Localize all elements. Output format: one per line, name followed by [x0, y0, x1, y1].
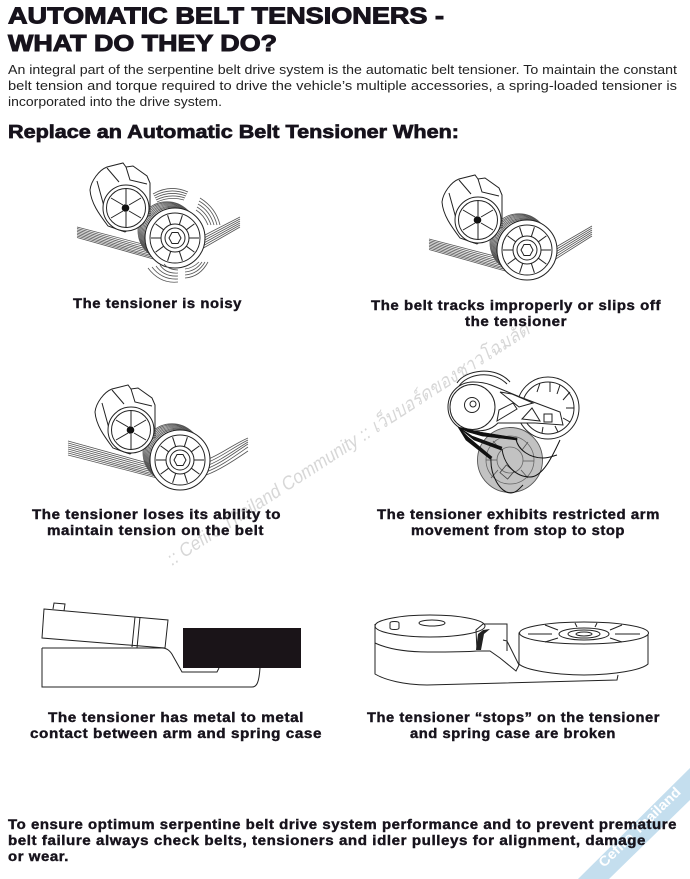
footer note: To ensure optimum serpentine belt drive system performance and to prevent premature — [8, 817, 677, 832]
caption: loses ability: maintain tension on the belt — [47, 523, 264, 538]
intro paragraph — [8, 62, 678, 109]
illustration: loses tension — [68, 385, 248, 490]
caption: belt tracks — [371, 298, 661, 329]
caption: broken stops: and spring case are broken — [410, 726, 616, 741]
intro paragraph: belt tension and torque required to drive the vehicle’s multiple accessories, a spring-loaded tensioner is — [8, 78, 678, 93]
caption: noisy: The tensioner is noisy — [73, 296, 242, 311]
illustration: restricted arm movement — [448, 371, 579, 493]
illustration: metal to metal contact — [42, 603, 301, 687]
caption: belt tracks: the tensioner — [465, 314, 567, 329]
title — [8, 2, 444, 56]
caption: belt tracks: The belt tracks improperly or slips off — [371, 298, 661, 313]
caption: restricted arm: The tensioner exhibits restricted arm — [377, 507, 660, 522]
footer note: belt failure always check belts, tensioners and idler pulleys for alignment, damage — [8, 833, 646, 848]
caption: loses ability — [32, 507, 281, 538]
intro paragraph: incorporated into the drive system. — [8, 94, 222, 109]
watermark text: :: Cefiro Thailand Community :: เว็บบอร์ดของชาวโฉมลัด — [162, 317, 535, 570]
corner ribbon: Cefiro Thailand — [595, 784, 684, 870]
corner ribbon — [578, 768, 690, 879]
caption: broken stops: The tensioner “stops” on the tensioner — [367, 710, 660, 725]
title: WHAT DO THEY DO? — [8, 30, 277, 56]
caption: broken stops — [367, 710, 660, 741]
illustration: belt tracks improperly — [429, 175, 592, 280]
title: AUTOMATIC BELT TENSIONERS - — [8, 2, 444, 28]
section heading: Replace an Automatic Belt Tensioner When: — [8, 121, 459, 142]
caption: metal contact: contact between arm and spring case — [30, 726, 322, 741]
illustration: broken stops — [375, 615, 648, 685]
intro paragraph: An integral part of the serpentine belt drive system is the automatic belt tensioner. To maintain the constant — [8, 62, 677, 77]
footer note — [8, 817, 677, 864]
footer note: or wear. — [8, 849, 69, 864]
caption: restricted arm — [377, 507, 660, 538]
illustration: noisy tensioner — [77, 163, 240, 282]
caption: metal contact — [30, 710, 322, 741]
caption: restricted arm: movement from stop to stop — [411, 523, 625, 538]
caption: loses ability: The tensioner loses its ability to — [32, 507, 281, 522]
caption: metal contact: The tensioner has metal to metal — [48, 710, 304, 725]
